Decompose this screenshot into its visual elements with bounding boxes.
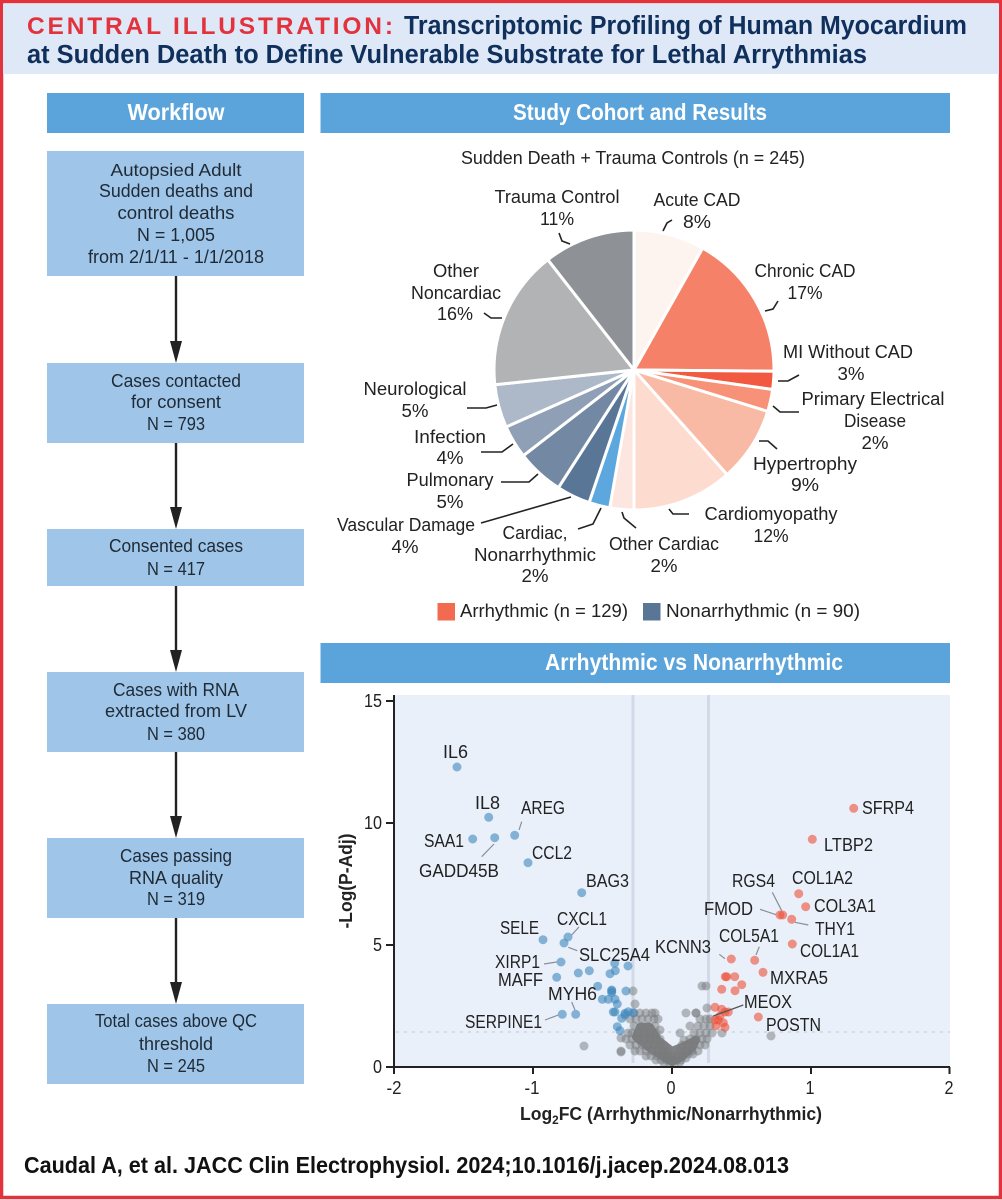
label: hypertrophy: [753, 441, 858, 495]
label: trauma control: [494, 186, 620, 244]
label: vascular damage: Vascular Damage: [337, 514, 475, 535]
gene labels: IL8: [475, 793, 500, 813]
label: cardiomyopathy: 12%: [754, 525, 788, 546]
label: acute CAD: 8%: [683, 211, 711, 232]
gene leader lines: [482, 822, 808, 1020]
step: total above QC: threshold: [139, 1034, 213, 1054]
heading: arrhythmic vs nonarrhythmic: Arrhythmic vs Nonarrhythmic: [545, 649, 843, 675]
x axis title: FC (Arrhythmic/Nonarrhythmic): [559, 1104, 822, 1124]
red up-regulated points: [710, 804, 858, 1032]
arrow: step 2 to 3: [170, 443, 182, 529]
label: cardiomyopathy: Cardiomyopathy: [704, 503, 838, 524]
pie labels: [337, 186, 944, 586]
label: primary electrical disease: Disease: [844, 410, 906, 431]
heading: arrhythmic vs nonarrhythmic: [320, 643, 950, 683]
y axis tick labels: 10: [364, 812, 382, 833]
legend: [438, 600, 860, 621]
x axis title: 2: [552, 1113, 559, 1127]
gene labels: MXRA5: [770, 968, 828, 988]
gene labels: COL1A1: [800, 941, 859, 961]
gene labels: COL5A1: [719, 926, 779, 946]
gene labels: POSTN: [766, 1015, 821, 1035]
gene labels: GADD45B: [419, 861, 499, 881]
label: neurological: [364, 378, 497, 421]
x axis title: Log: [520, 1104, 553, 1124]
label: cardiomyopathy: [669, 503, 838, 546]
heading: study cohort: [320, 93, 950, 133]
step: consented cases: Consented cases: [109, 536, 243, 556]
x axis tick labels: 1: [806, 1077, 814, 1098]
gene labels: SERPINE1: [465, 1012, 542, 1032]
gene labels: MEOX: [744, 992, 792, 1012]
label: cardiac nonarrhythmic: [474, 508, 601, 586]
step: consented cases: [47, 529, 304, 586]
step: RNA extracted: [47, 672, 304, 752]
label: other noncardiac: 16%: [437, 303, 473, 324]
step: consented cases: N = 417: [147, 559, 205, 579]
y axis tick labels: 15: [364, 690, 382, 711]
blue down-regulated points: [452, 762, 638, 1035]
gene labels: RGS4: [732, 871, 775, 891]
gene labels: LTBP2: [824, 835, 873, 855]
label: other cardiac: 2%: [650, 555, 678, 576]
y axis title: -Log(P-Adj): [336, 834, 356, 928]
step: autopsied adults: Sudden deaths and: [99, 181, 253, 201]
step: autopsied adults: [47, 151, 304, 276]
y axis tick labels: 5: [373, 934, 382, 955]
axes: [386, 695, 950, 1074]
gene labels: THY1: [815, 919, 855, 939]
gene labels: SELE: [500, 918, 539, 938]
gray non-significant points: [580, 982, 776, 1068]
title banner: CENTRAL ILLUSTRATION:: [27, 13, 393, 40]
step: RNA quality: [47, 838, 304, 918]
panel: study cohort and results: [320, 93, 954, 1127]
title banner: at Sudden Death to Define Vulnerable Substrate for Lethal Arrythmias: [27, 41, 867, 69]
label: trauma control: 11%: [540, 208, 574, 229]
label: hypertrophy: Hypertrophy: [753, 453, 858, 474]
label: primary electrical disease: Primary Electrical: [802, 388, 944, 409]
arrow: step 4 to 5: [170, 752, 182, 838]
step: RNA extracted: extracted from LV: [105, 701, 247, 721]
step: RNA quality: RNA quality: [129, 868, 223, 888]
label: chronic CAD: [754, 260, 856, 311]
gene labels: CXCL1: [557, 909, 607, 929]
gene labels: SAA1: [424, 831, 464, 851]
x axis tick labels: 2: [944, 1077, 954, 1098]
gene labels: AREG: [521, 798, 565, 818]
gene labels: COL1A2: [792, 868, 853, 888]
gene labels: BAG3: [586, 871, 629, 891]
heading: study cohort: Study Cohort and Results: [513, 99, 767, 125]
step: autopsied adults: from 2/1/11 - 1/1/2018: [88, 247, 264, 267]
label: other cardiac: Other Cardiac: [609, 533, 719, 554]
label: pulmonary: 5%: [436, 491, 464, 512]
arrow: step 5 to 6: [170, 918, 182, 1004]
label: pulmonary: [406, 469, 538, 512]
label: vascular damage: 4%: [392, 536, 418, 557]
label: primary electrical disease: 2%: [862, 432, 888, 453]
x axis tick labels: 0: [666, 1077, 676, 1098]
label: cardiac nonarrhythmic: Nonarrhythmic: [474, 544, 596, 565]
label: vascular damage: [337, 497, 571, 557]
step: RNA extracted: N = 380: [147, 724, 205, 744]
pie chart: [494, 230, 774, 510]
label: cardiac nonarrhythmic: Cardiac,: [502, 522, 568, 543]
y axis tick labels: 0: [373, 1056, 382, 1077]
gene labels: SFRP4: [862, 798, 914, 818]
label: other noncardiac: Noncardiac: [411, 282, 501, 303]
label: other cardiac: [609, 512, 719, 576]
title banner: [3, 4, 999, 74]
step: RNA quality: Cases passing: [120, 846, 232, 866]
citation: Caudal A, et al. JACC Clin Electrophysiol. 2024;10.1016/j.jacep.2024.08.013: [24, 1152, 789, 1178]
label: hypertrophy: 9%: [791, 474, 819, 495]
x axis tick labels: -1: [524, 1077, 540, 1098]
label: primary electrical disease: [773, 388, 944, 453]
gene labels: COL3A1: [814, 896, 876, 916]
label: infection: [414, 426, 513, 468]
gene labels: [419, 742, 914, 1035]
significance thresholds: [396, 695, 950, 1063]
label: other noncardiac: [411, 260, 502, 324]
legend: Nonarrhythmic (n = 90): [666, 600, 860, 621]
label: trauma control: Trauma Control: [494, 186, 620, 207]
pie chart title: Sudden Death + Trauma Controls (n = 245): [461, 147, 805, 168]
label: neurological: 5%: [402, 400, 428, 421]
label: infection: Infection: [414, 426, 486, 447]
arrow: step 3 to 4: [170, 586, 182, 672]
step: RNA quality: N = 319: [147, 889, 205, 909]
label: other noncardiac: Other: [433, 260, 479, 281]
step: contacted for consent: for consent: [131, 392, 221, 412]
step: total above QC: Total cases above QC: [95, 1011, 257, 1031]
gene labels: MAFF: [498, 970, 543, 990]
legend: Arrhythmic (n = 129): [460, 600, 628, 621]
label: chronic CAD: Chronic CAD: [754, 260, 856, 281]
gene labels: SLC25A4: [579, 945, 650, 965]
heading: workflow: [47, 93, 304, 133]
arrow: step 1 to 2: [170, 276, 182, 363]
plot background: [394, 695, 950, 1067]
step: contacted for consent: Cases contacted: [111, 371, 241, 391]
step: autopsied adults: control deaths: [118, 203, 234, 223]
label: chronic CAD: 17%: [788, 282, 822, 303]
gene labels: FMOD: [704, 899, 753, 919]
label: neurological: Neurological: [364, 378, 466, 399]
x axis tick labels: -2: [386, 1077, 402, 1098]
step: total above QC: [47, 1004, 304, 1084]
step: RNA extracted: Cases with RNA: [113, 680, 239, 700]
panel: workflow: [47, 93, 304, 1084]
title banner: Transcriptomic Profiling of Human Myocardium: [404, 12, 967, 40]
label: acute CAD: Acute CAD: [654, 189, 740, 210]
step: contacted for consent: N = 793: [147, 414, 205, 434]
label: MI without CAD: MI Without CAD: [783, 341, 913, 362]
label: cardiac nonarrhythmic: 2%: [522, 565, 548, 586]
label: MI without CAD: 3%: [838, 363, 864, 384]
y axis tick labels: [364, 690, 382, 1077]
gene labels: MYH6: [548, 984, 597, 1004]
label: MI without CAD: [778, 341, 913, 384]
step: autopsied adults: N = 1,005: [137, 225, 215, 245]
gene labels: XIRP1: [495, 952, 540, 972]
label: pulmonary: Pulmonary: [406, 469, 494, 490]
step: total above QC: N = 245: [147, 1056, 205, 1076]
step: autopsied adults: Autopsied Adult: [110, 160, 242, 180]
gene labels: IL6: [443, 742, 468, 762]
gene labels: CCL2: [532, 843, 572, 863]
gray dense core: [636, 1027, 696, 1062]
heading: workflow: Workflow: [128, 99, 225, 125]
x axis tick labels: [386, 1077, 954, 1098]
step: contacted for consent: [47, 363, 304, 443]
volcano plot: [336, 690, 954, 1127]
label: infection: 4%: [436, 447, 464, 468]
label: acute CAD: [654, 189, 740, 232]
gene labels: KCNN3: [655, 937, 711, 957]
